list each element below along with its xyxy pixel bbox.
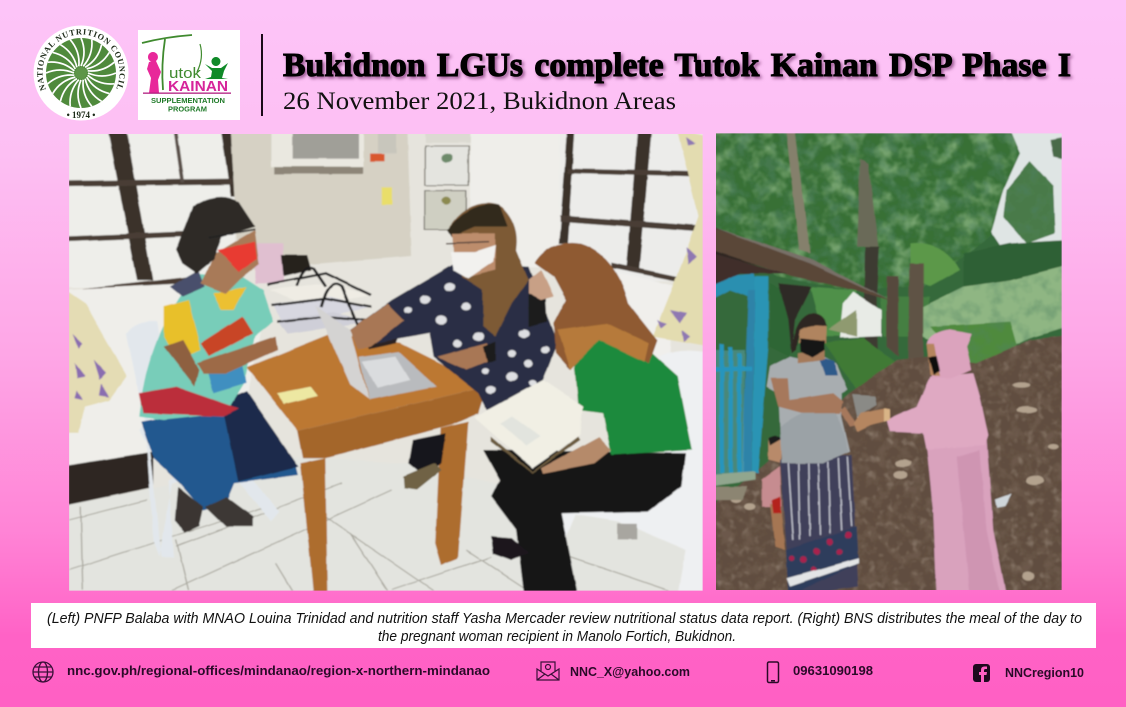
logo: Tutok Kainan Supplementation Program: PROGRAM xyxy=(168,106,207,114)
ground xyxy=(710,335,1068,597)
table xyxy=(247,333,487,597)
caption panel xyxy=(31,603,1096,648)
tree canopy xyxy=(716,133,1062,337)
footer: website: nnc.gov.ph/regional-offices/mindanao/region-x-northern-mindanao xyxy=(67,663,490,678)
footer: facebook: NNCregion10 xyxy=(1005,665,1084,680)
title: Bukidnon LGUs complete Tutok Kainan DSP Phase I xyxy=(283,47,1071,84)
grass slope xyxy=(922,265,1062,344)
tree trunks xyxy=(778,133,924,359)
icon: mobile phone xyxy=(768,662,778,682)
child behind woman xyxy=(762,436,785,550)
food packet handover xyxy=(852,395,890,432)
header divider xyxy=(261,34,263,116)
lower left wall and baseboard xyxy=(60,283,267,467)
paper stack behind xyxy=(255,243,284,283)
sky xyxy=(990,133,1062,246)
person left: seated woman in teal shirt xyxy=(139,197,298,533)
caption panel: the pregnant woman recipient in Manolo Fortich, Bukidnon. xyxy=(378,629,736,645)
person right: woman in green shirt xyxy=(483,243,692,597)
right curtain xyxy=(652,134,703,346)
left window xyxy=(69,134,236,290)
footer: phone: 09631090198 xyxy=(793,663,873,678)
white building xyxy=(840,292,882,338)
logo: National Nutrition Council seal: NATIONAL NUTRITION COUNCIL xyxy=(37,29,125,92)
icon: facebook xyxy=(973,664,990,682)
white wall xyxy=(470,130,562,267)
health worker in pink suit xyxy=(884,329,1007,597)
photo: office data review xyxy=(60,130,711,597)
footer: phone xyxy=(768,662,873,682)
logo: Tutok Kainan Supplementation Program: KAINAN xyxy=(168,79,228,95)
floor tiles xyxy=(69,482,669,590)
right window xyxy=(559,130,711,285)
photo: meal distribution outdoors xyxy=(710,130,1068,597)
footer: website xyxy=(33,662,490,682)
white folder xyxy=(475,380,583,473)
wall plaques xyxy=(425,130,470,230)
caption panel: (Left) PNFP Balaba with MNAO Louina Trinidad and nutrition staff Yasha Mercader review nutritional status data report. (Right) BNS distributes the meal of the day to xyxy=(47,611,1082,627)
logo: Tutok Kainan Supplementation Program xyxy=(138,30,240,120)
footer: email xyxy=(537,662,690,680)
logo: Tutok Kainan Supplementation Program: SUPPLEMENTATION xyxy=(151,98,225,105)
left curtain xyxy=(69,292,127,434)
logo: National Nutrition Council seal: • 1974 • xyxy=(67,110,95,120)
icon: envelope xyxy=(537,662,559,680)
logo: Tutok Kainan Supplementation Program: utok xyxy=(169,65,202,82)
laptop xyxy=(315,305,437,400)
blue gate and posts xyxy=(710,273,768,500)
footer: facebook xyxy=(973,664,1084,682)
air conditioner xyxy=(271,130,397,205)
corrugated roof xyxy=(710,225,890,301)
person middle: woman in patterned blouse xyxy=(350,203,558,490)
pregnant woman xyxy=(767,313,859,597)
footer: email: NNC_X@yahoo.com xyxy=(570,665,690,679)
subtitle: date and location: 26 November 2021, Bukidnon Areas xyxy=(283,88,676,115)
shrubs xyxy=(825,338,897,390)
document tray xyxy=(266,266,372,334)
logo: National Nutrition Council seal xyxy=(34,26,128,120)
wall panel xyxy=(231,130,412,270)
right plastic chair xyxy=(561,350,702,590)
left plastic chair xyxy=(126,321,280,558)
icon: globe xyxy=(33,662,53,682)
